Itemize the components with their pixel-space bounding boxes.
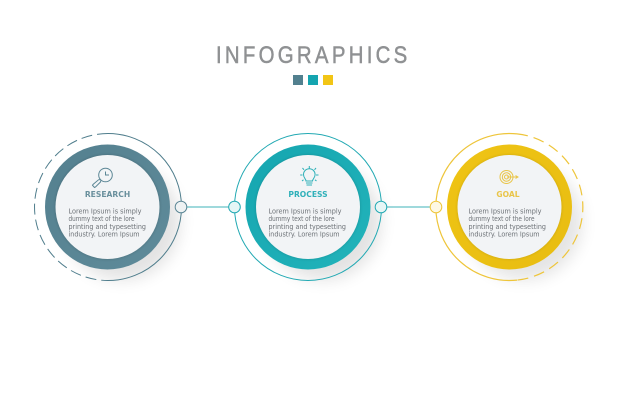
- body text: [268, 206, 346, 238]
- drop shadow: [265, 164, 381, 280]
- body text: Lorem Ipsum is simply: [468, 206, 542, 216]
- heading: PROCESS: [288, 190, 328, 199]
- drop shadow: [64, 164, 180, 280]
- heading: GOAL: [496, 190, 520, 199]
- node: goal left: [430, 201, 442, 213]
- thick ring: [447, 144, 572, 270]
- body text: industry. Lorem Ipsum: [268, 229, 340, 238]
- connector: process to goal: [387, 206, 430, 208]
- body text: dummy text of the lore: [68, 214, 135, 223]
- body text: printing and typesetting: [68, 222, 146, 231]
- outer ring: solid and dashed: [35, 134, 181, 280]
- outer ring: [234, 134, 382, 280]
- node: process right: [375, 201, 387, 213]
- node: process left: [229, 201, 240, 213]
- body text: industry. Lorem Ipsum: [468, 229, 540, 238]
- body text: dummy text of the lore: [468, 214, 535, 223]
- body text: industry. Lorem Ipsum: [68, 229, 140, 238]
- panel: research: [35, 134, 181, 280]
- body text: dummy text of the lore: [268, 214, 335, 223]
- title colour squares: [293, 75, 333, 85]
- inner disc: [458, 155, 562, 259]
- thick ring: [45, 144, 170, 270]
- body text: Lorem Ipsum is simply: [68, 206, 142, 216]
- panel: process: [234, 134, 382, 280]
- panel: goal: [436, 134, 583, 280]
- node: research right: [175, 201, 187, 213]
- icon: target with arrow: [500, 170, 518, 184]
- body text: [68, 206, 146, 238]
- inner disc: [256, 155, 360, 259]
- body text: Lorem Ipsum is simply: [268, 206, 342, 216]
- outer ring: solid and dashed: [436, 134, 583, 280]
- body text: [468, 206, 546, 238]
- drop shadow: [466, 164, 582, 280]
- thick ring: [246, 144, 370, 270]
- icon: magnifier with clock: [92, 168, 112, 188]
- body text: printing and typesetting: [268, 222, 346, 231]
- heading: RESEARCH: [85, 190, 130, 199]
- inner disc: [56, 155, 160, 259]
- title: INFOGRAPHICS: [216, 41, 407, 68]
- icon: light bulb: [300, 166, 318, 185]
- body text: printing and typesetting: [468, 222, 546, 231]
- connector: research to process: [187, 206, 229, 208]
